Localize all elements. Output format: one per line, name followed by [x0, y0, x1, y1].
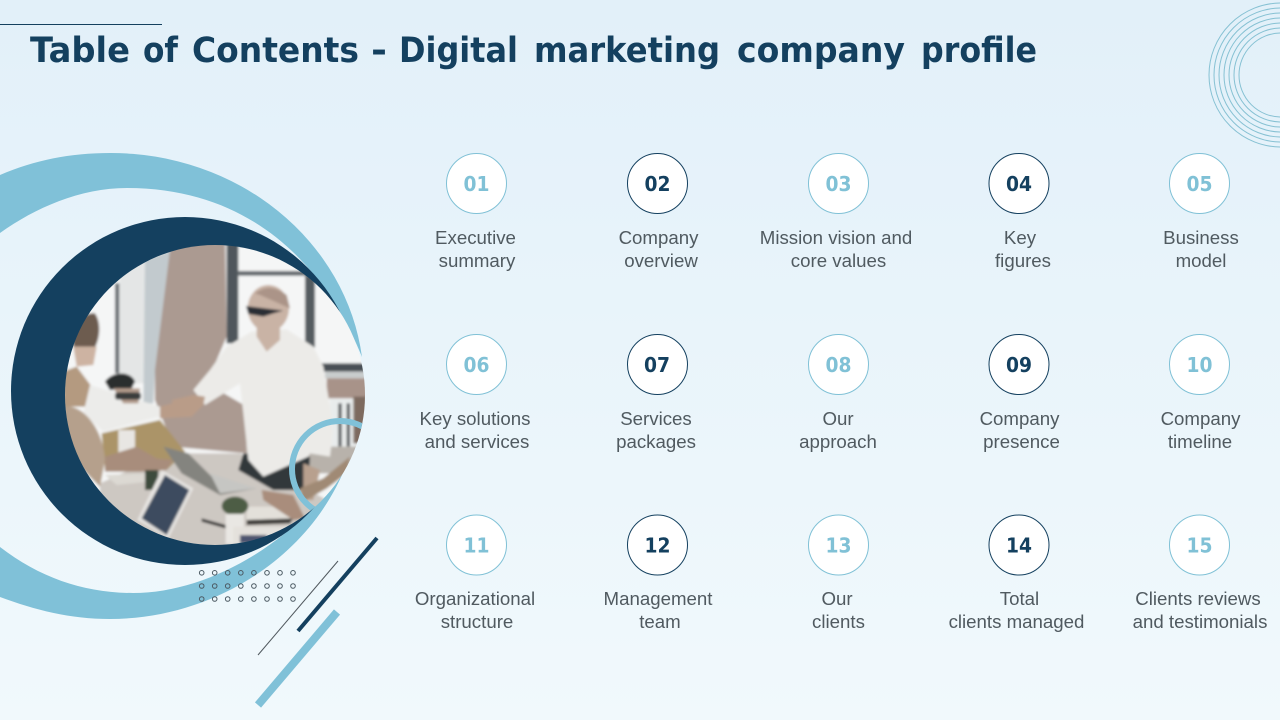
item 14: Total clients managed: Total: [1000, 588, 1039, 609]
item 07: Services packages: packages: [616, 431, 696, 452]
item 12: Management team: team: [639, 611, 681, 632]
item 02: Company overview: Company: [619, 227, 699, 248]
top accent line: [0, 24, 162, 26]
graphic: circular photo composition: [0, 153, 388, 619]
item 04: Key figures: figures: [995, 250, 1051, 271]
item 06: Key solutions and services: and services: [425, 431, 529, 452]
item 10: Company timeline: [1161, 334, 1241, 452]
title: Table: [30, 31, 130, 71]
item 11: Organizational structure: [415, 515, 535, 632]
title: marketing: [534, 31, 720, 71]
icon: concentric rings: [1209, 3, 1280, 147]
light blue upper crescent: [0, 153, 362, 357]
item 05: Business model: model: [1176, 250, 1226, 271]
item 14: Total clients managed: clients managed: [949, 611, 1084, 632]
item 11: Organizational structure: 11: [464, 534, 490, 558]
decorative dot grid: [199, 570, 295, 601]
item 07: Services packages: 07: [644, 353, 670, 377]
item 14: Total clients managed: 14: [1006, 534, 1032, 558]
photo: business handshake: [65, 245, 365, 545]
item 13: Our clients: Our: [821, 588, 853, 609]
item 04: Key figures: Key: [1004, 227, 1037, 248]
item 06: Key solutions and services: [420, 334, 530, 452]
item 02: Company overview: overview: [624, 250, 698, 271]
item 01: Executive summary: summary: [439, 250, 516, 271]
item 15: Clients reviews and testimonials: and testimonials: [1133, 611, 1267, 632]
item 15: Clients reviews and testimonials: Clients reviews: [1135, 588, 1261, 609]
thin diagonal line: [258, 561, 338, 655]
item 08: Our approach: [799, 334, 877, 452]
item 09: Company presence: [980, 334, 1060, 452]
item 06: Key solutions and services: Key solutions: [420, 408, 530, 429]
title: [30, 31, 1037, 71]
item 11: Organizational structure: structure: [441, 611, 513, 632]
item 04: Key figures: [989, 154, 1051, 271]
item 04: Key figures: 04: [1006, 172, 1032, 196]
item 10: Company timeline: 10: [1186, 353, 1212, 377]
item 12: Management team: 12: [644, 534, 670, 558]
item 05: Business model: 05: [1186, 172, 1212, 196]
item 14: Total clients managed: [949, 515, 1084, 632]
item 15: Clients reviews and testimonials: [1133, 515, 1267, 632]
item 13: Our clients: [808, 515, 868, 632]
item 03: Mission vision and core values: [760, 154, 912, 271]
item 12: Management team: Management: [604, 588, 713, 609]
item 13: Our clients: clients: [812, 611, 865, 632]
small light blue ring: [289, 418, 362, 510]
title: of: [143, 31, 179, 71]
title: profile: [921, 31, 1037, 71]
title: -: [371, 31, 387, 71]
item 08: Our approach: 08: [826, 353, 852, 377]
item 12: Management team: [604, 515, 713, 632]
item 05: Business model: Business: [1163, 227, 1239, 248]
item 08: Our approach: Our: [822, 408, 854, 429]
item 03: Mission vision and core values: core values: [791, 250, 886, 271]
item 10: Company timeline: timeline: [1168, 431, 1232, 452]
item 01: Executive summary: [435, 154, 516, 271]
title: Digital: [399, 31, 518, 71]
title: Contents: [192, 31, 359, 71]
item 01: Executive summary: Executive: [435, 227, 516, 248]
item 07: Services packages: [616, 334, 696, 452]
light diagonal line: [258, 612, 337, 705]
item 08: Our approach: approach: [799, 431, 877, 452]
item 05: Business model: [1163, 154, 1239, 271]
item 03: Mission vision and core values: Mission vision and: [760, 227, 912, 248]
light blue lower crescent: [0, 463, 347, 619]
item 01: Executive summary: 01: [464, 172, 490, 196]
item 06: Key solutions and services: 06: [464, 353, 490, 377]
item 03: Mission vision and core values: 03: [826, 172, 852, 196]
item 13: Our clients: 13: [826, 534, 852, 558]
item 10: Company timeline: Company: [1161, 408, 1241, 429]
item 15: Clients reviews and testimonials: 15: [1186, 534, 1212, 558]
dark diagonal line: [298, 538, 377, 631]
item 07: Services packages: Services: [620, 408, 692, 429]
item 09: Company presence: 09: [1006, 353, 1032, 377]
item 02: Company overview: 02: [644, 172, 670, 196]
item 11: Organizational structure: Organizational: [415, 588, 535, 609]
dark blue crescent: [11, 217, 359, 565]
title: company: [737, 31, 905, 71]
item 09: Company presence: Company: [980, 408, 1060, 429]
item 09: Company presence: presence: [983, 431, 1060, 452]
item 02: Company overview: [619, 154, 699, 271]
